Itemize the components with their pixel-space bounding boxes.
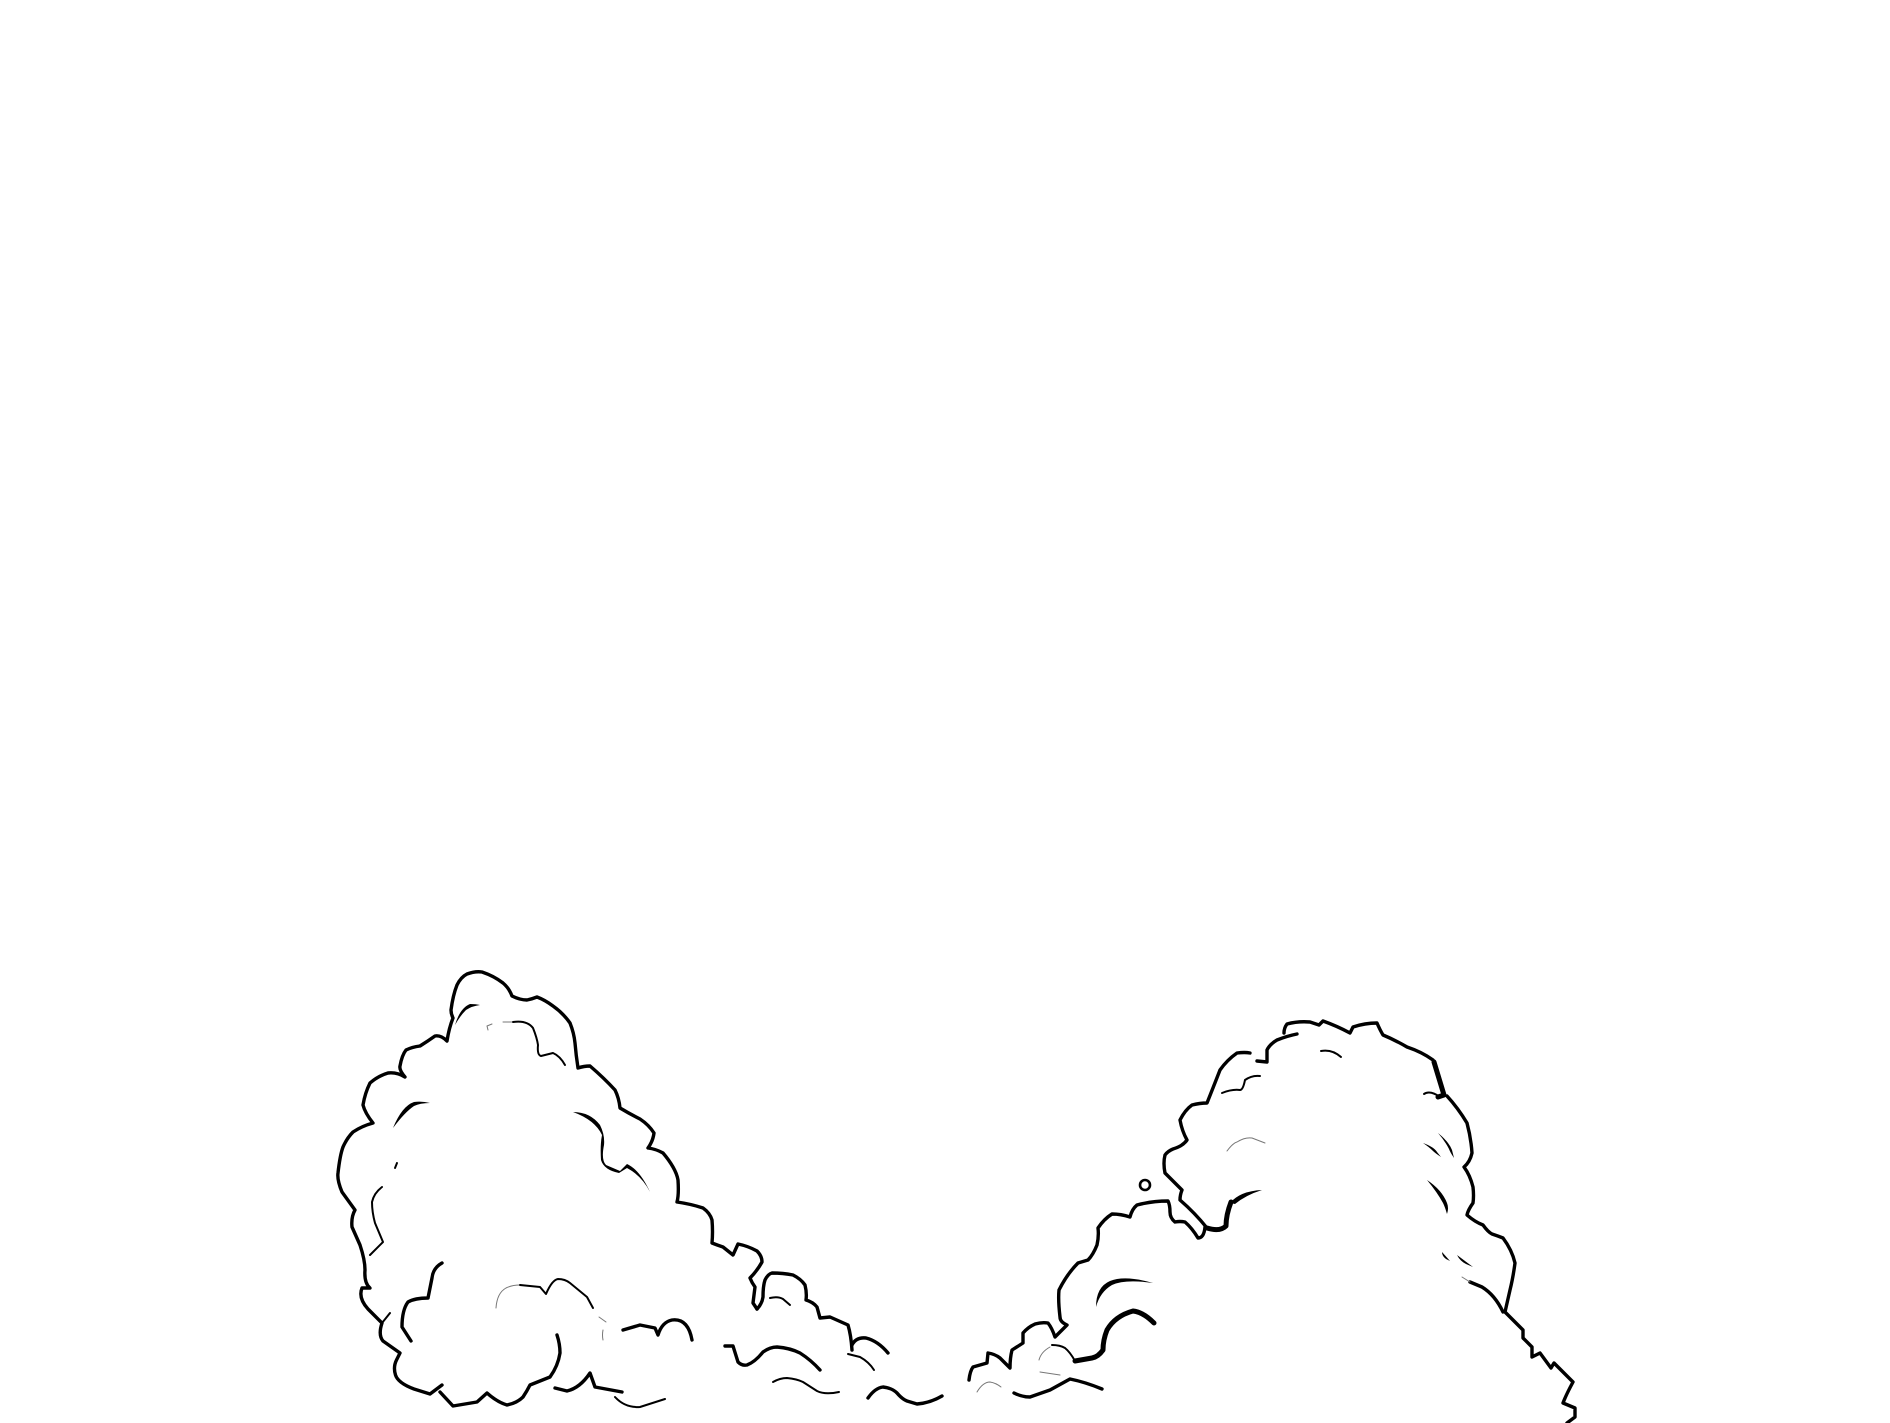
right cloud (969, 1021, 1575, 1423)
left cloud outer outline (338, 972, 762, 1394)
left cloud base outline (440, 1335, 560, 1406)
small droplet circle (1140, 1180, 1150, 1190)
left cloud (338, 972, 942, 1407)
right cloud inner fold lines (977, 1051, 1503, 1397)
left cloud lower-right lobe (757, 1273, 852, 1350)
right cloud upper outline (1164, 1052, 1250, 1228)
right cloud left-side outline (969, 1201, 1205, 1380)
right cloud thick contour accent (1207, 1062, 1444, 1230)
left cloud inner fold lines (370, 1004, 942, 1407)
right cloud right-side outline (1447, 1096, 1575, 1423)
right cloud top outline (1257, 1021, 1433, 1062)
